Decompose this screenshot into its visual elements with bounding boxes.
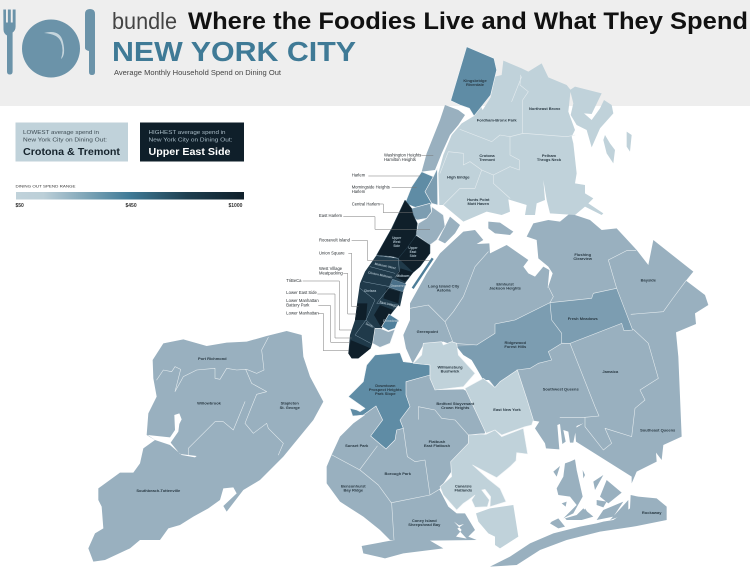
region: Brooklyn neighbourhoods [327,353,485,558]
labels: neighbourhood names: Coney Island [412,518,437,523]
region: Harlem [405,172,433,212]
labels: neighbourhood names: Pelham [542,153,557,158]
labels: callouts: East Harlem [319,213,343,218]
panel: lowest spend: Crotona & Tremont [23,147,121,158]
labels: callouts: Washington Heights [384,153,421,158]
islets [603,132,632,163]
labels: Manhattan neighbourhoods: Chinatown [383,319,399,323]
labels: Manhattan neighbourhoods: Chelsea [364,289,376,293]
region: Gramercy [389,279,406,292]
region: Queens neighbourhoods [403,213,708,483]
labels: callouts: Lower Manhattan [286,310,319,316]
labels: neighbourhood names: Bensonhurst [341,484,366,488]
labels: callouts: Central Harlem [352,202,380,206]
labels: callouts: Lower East Side [286,290,317,295]
labels: neighbourhood names: Forest Hills [504,344,527,349]
labels: neighbourhood names: Hunts Point [467,197,490,202]
labels: neighbourhood names: East Flatbush [424,443,451,448]
labels: callouts: Battery Park [286,302,310,308]
map: Staten Island [88,331,323,562]
title: Where the Foodies Live and What They Spend [188,8,748,35]
labels: neighbourhood names: East New York [493,407,521,412]
labels: callouts: Hamilton Heights [384,157,416,162]
map: Manhattan [303,156,445,358]
labels: neighbourhood names: Riverdale [466,82,485,87]
labels: neighbourhood names: Park Slope [375,391,396,396]
labels: callouts: Roosevelt Island [319,238,351,242]
region: Upper East Side [398,236,430,272]
subtitle: Average Monthly Household Spend on Dining Out [114,70,281,77]
labels: callouts: Union Square [319,250,345,256]
region: Midtown East [395,268,413,282]
region: Upper West Side [377,200,417,258]
labels: neighbourhood names: St. George [280,405,301,410]
region: Washington Heights [422,105,465,172]
labels: neighbourhood names: Bushwick [441,368,460,374]
labels: Manhattan neighbourhoods: East [410,250,417,254]
legend: dining out spend range: $1000 [228,203,243,209]
labels: neighbourhood names: Crotona [479,153,495,158]
region: Kingsbridge [451,47,497,116]
region: Canarsie marsh [476,505,518,548]
labels: Manhattan neighbourhoods: Side [393,244,400,248]
labels: neighbourhood names: Rockaway [642,510,662,515]
labels: Manhattan neighbourhoods: Gramercy [391,284,406,288]
icon: fork, plate and knife [3,9,95,78]
region: Lower East Side [374,305,393,328]
labels: neighbourhood names: Canarsie [455,484,473,488]
region: Battery Park [348,340,371,358]
labels: neighbourhood names: Ridgewood [505,340,527,345]
labels: neighbourhood names [136,78,676,527]
labels: neighbourhood names: Astoria [437,288,451,292]
labels: neighbourhood names: Prospect Heights [369,387,403,392]
labels: neighbourhood names: Southbeach-Tottenville [136,488,181,493]
region: City Island shore [570,87,613,147]
labels: neighbourhood names: Sunset Park [345,443,369,448]
labels: neighbourhood names: Bedford Stuyvesant [436,401,475,406]
region: Williamsburg and Bushwick [413,342,475,390]
legend: dining out spend range: $450 [126,203,137,209]
labels: Manhattan neighbourhoods [364,236,418,329]
region: Ridgewood and Forest Hills [457,303,562,387]
map: Queens [403,213,708,567]
leader lines [303,156,433,351]
labels: neighbourhood names: Clearview [573,256,593,261]
region: East Harlem [416,207,445,245]
region: East River islands [438,217,513,243]
labels: Manhattan neighbourhoods: Clinton Midtown [368,270,393,280]
labels: neighbourhood names: Jackson Heights [489,286,522,290]
labels: neighbourhood names: Elmhurst [496,282,514,286]
labels: neighbourhood names: Southeast Queens [640,428,676,432]
labels: Manhattan neighbourhoods: West [393,240,401,244]
labels: callouts: Meatpacking [319,270,343,276]
panel: highest spend [140,122,244,162]
borders [410,251,686,450]
labels: neighbourhood names: Long Island City [428,284,460,288]
labels: neighbourhood names: Mott Haven [468,201,490,206]
region: Central Harlem [412,203,432,220]
region: Jamaica Bay marshes [550,459,628,528]
labels: neighbourhood names: Flatlands [455,488,473,492]
labels: neighbourhood names: Bay Ridge [344,488,364,492]
labels: neighbourhood names: Greenpoint [417,329,439,334]
labels: Manhattan neighbourhoods: Midtown West [374,262,397,270]
labels: neighbourhood names: Borough Park [384,471,412,476]
legend: dining out spend range: DINING OUT SPEND RANGE [16,184,76,188]
labels: neighbourhood names: Throgs Neck [537,157,562,162]
labels: callouts: Lower Manhattan [286,298,319,303]
labels: neighbourhood names: Tremont [479,157,496,162]
labels: Manhattan neighbourhoods: Upper [408,246,418,250]
labels: callouts: Harlem [352,172,366,178]
region: Fresh Meadows [550,288,633,343]
labels: neighbourhood names: Jamaica [602,369,619,374]
labels: callouts: TriBeCa [286,278,302,283]
region: Canarsie and Flatlands [440,428,528,510]
inlet [454,522,467,539]
region: West Village [355,303,367,320]
region: Brooklyn waterfront [373,328,395,347]
labels: neighbourhood names: Crown Heights [441,405,470,410]
labels: Manhattan neighbourhoods: Side [410,254,417,258]
labels: Manhattan neighbourhoods: Midtown [397,274,410,278]
logo: bundle: bundle [112,8,177,34]
labels: neighbourhood names: Southwest Queens [543,386,579,392]
labels: neighbourhood names: Kingsbridge [463,78,487,83]
map: The Bronx [405,47,632,222]
labels: neighbourhood names: Flushing [574,252,592,257]
labels: Manhattan neighbourhoods: East Village [379,300,398,308]
labels: neighbourhood names: High Bridge [447,174,470,180]
labels: callouts: Harlem [352,189,366,194]
labels: neighbourhood names: Bayside [641,278,657,282]
labels: callouts: West Village [319,266,343,271]
header band [0,0,750,106]
map: Brooklyn [327,342,533,558]
region: Downtown, Prospect Heights, Park Slope [348,353,430,449]
labels: neighbourhood names: Fresh Meadows [568,316,598,321]
labels: neighbourhood names: Fordham-Bronx Park [477,118,517,122]
labels: Manhattan neighbourhoods: SoHo [365,322,374,329]
borders [332,407,485,540]
labels: neighbourhood names: Sheepshead Bay [408,522,441,527]
legend: dining out spend range [16,184,244,209]
region: Roosevelt Island [413,258,433,288]
labels: neighbourhood names: Flatbush [429,439,446,444]
legend: dining out spend range: $50 [16,203,24,209]
region: East New York [465,370,533,435]
panel: lowest spend: LOWEST average spend in [23,130,99,136]
heading: New York City: NEW YORK CITY [112,36,356,67]
labels: neighbourhood names: Port Richmond [198,356,227,361]
labels: neighbourhood names: Northeast Bronx [529,106,561,111]
region: Midtown and lower Manhattan [348,255,413,358]
panel: lowest spend: New York City on Dining Out: [23,138,108,144]
labels: neighbourhood names: Williamsburg [437,364,463,370]
region: Chinatown [382,314,398,331]
labels: callouts: Morningside Heights [352,184,390,190]
region: Bronx neighbourhoods [438,61,603,222]
panel: lowest spend [16,122,128,162]
region: East Village [383,288,400,303]
labels: Manhattan neighbourhoods: Upper [392,236,402,240]
panel: highest spend: New York City on Dining Out: [148,138,233,144]
panel: highest spend: Upper East Side [148,147,231,158]
labels: callouts [286,153,421,316]
labels: neighbourhood names: Willowbrook [197,400,222,406]
labels: neighbourhood names: Stapleton [281,400,299,406]
region: East of Harlem [425,168,438,205]
labels: neighbourhood names: Downtown [375,383,396,388]
panel: highest spend: HIGHEST average spend in [148,130,226,136]
region: Rockaway [490,495,667,567]
